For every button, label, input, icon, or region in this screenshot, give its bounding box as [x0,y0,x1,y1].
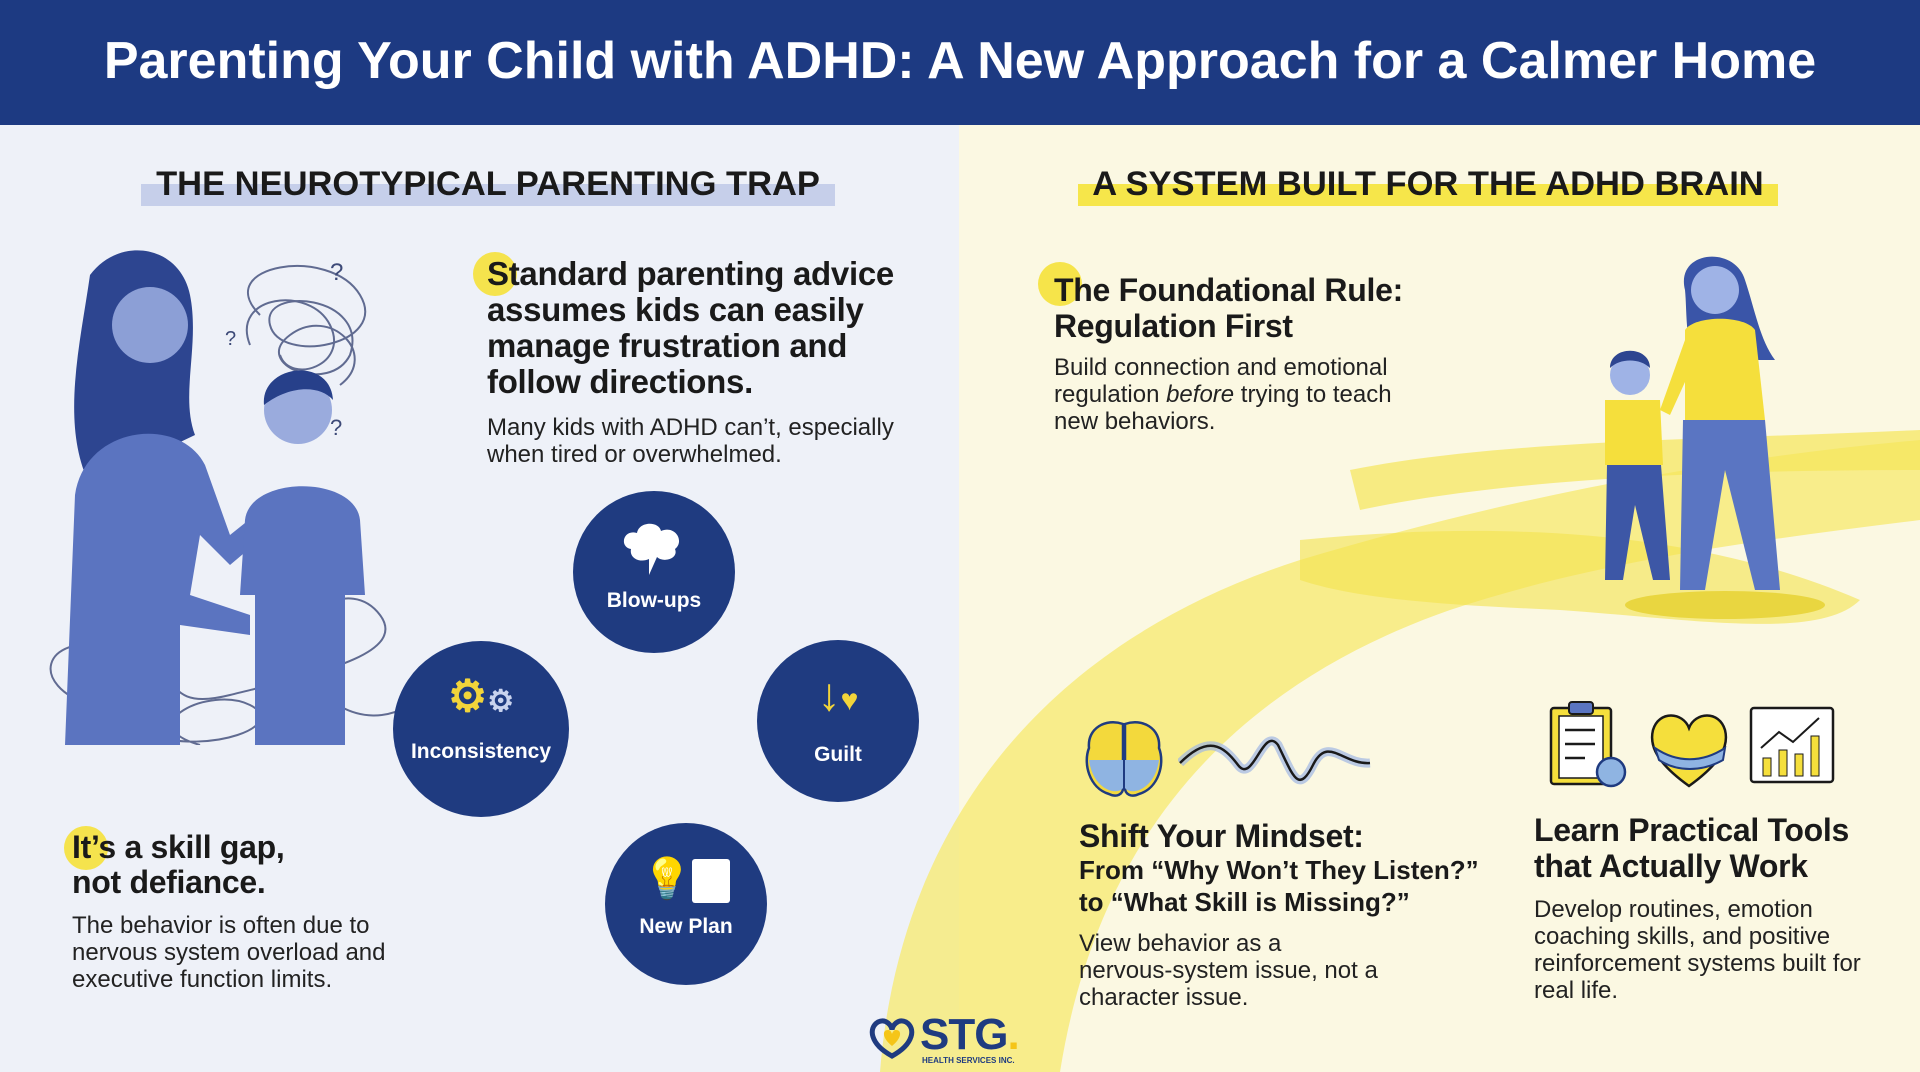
circle: Guilt: ↓♥ [818,668,858,720]
circle: Guilt [757,640,919,802]
text: standard advice: Many kids with ADHD can’t, especially when tired or overwhelmed. [487,414,894,468]
circle: Blow-ups [573,491,735,653]
circle: Inconsistency: ⚙⚙ [448,672,514,721]
icon: clipboard [1550,701,1626,788]
illustration: stressed parent and child [50,250,395,745]
header: Parenting Your Child with ADHD: A New Approach for a Calmer Home [104,32,1816,90]
text: foundational rule [1038,262,1403,435]
circle: Blow-ups: Blow-ups [607,589,701,612]
text: foundational rule: Build connection and emotional regulation before trying to teach new behaviors. [1054,354,1392,435]
text: foundational rule: The Foundational Rule: Regulation First [1054,272,1403,344]
header [0,0,1920,125]
illustration: stressed parent and child: ? [225,328,236,350]
logo [870,1010,1019,1065]
text: standard advice [473,252,894,468]
illustration: stressed parent and child: ? [330,259,343,286]
circle: New Plan: 💡 [642,857,692,901]
logo: STG. [920,1010,1019,1059]
icon: wave [1178,736,1370,784]
text: shift mindset: View behavior as a [1079,930,1281,957]
text: skill gap [64,826,386,993]
right heading: A SYSTEM BUILT FOR THE ADHD BRAIN [1092,165,1764,203]
text: standard advice: Standard parenting advice assumes kids can easily manage frustration and follow directions. [487,255,894,400]
circle: New Plan [605,823,767,985]
icon: growth chart [1750,706,1834,784]
icon: hugging heart [1650,714,1728,788]
left heading: THE NEUROTYPICAL PARENTING TRAP [156,165,820,203]
circle: Guilt: Guilt [814,743,862,766]
text: practical tools [1534,812,1861,1004]
text: shift mindset: From “Why Won’t They Listen?” [1079,855,1479,885]
text: skill gap: not defiance. [72,864,265,900]
text: shift mindset: Shift Your Mindset: [1079,818,1364,854]
illustration: parent and child walking [1605,256,1825,619]
text: practical tools: Learn Practical Tools that Actually Work [1534,812,1849,884]
text: practical tools: Develop routines, emotion coaching skills, and positive reinforcement systems built for real life. [1534,896,1861,1004]
text: skill gap: It’s a skill gap, [72,829,284,865]
circle: Inconsistency: Inconsistency [411,740,551,763]
logo: HEALTH SERVICES INC. [922,1056,1015,1065]
circle: Inconsistency [393,641,569,817]
text: shift mindset [1079,818,1479,1011]
illustration: stressed parent and child: ? [330,415,342,440]
text: skill gap: The behavior is often due to nervous system overload and executive function limits. [72,912,386,993]
text: shift mindset: to “What Skill is Missing?” [1079,887,1410,917]
circle: New Plan: New Plan [639,915,733,938]
right panel background [959,125,1920,1072]
icon: brain [1086,721,1162,797]
text: shift mindset: nervous-system issue, not a [1079,957,1378,984]
text: shift mindset: character issue. [1079,984,1248,1011]
